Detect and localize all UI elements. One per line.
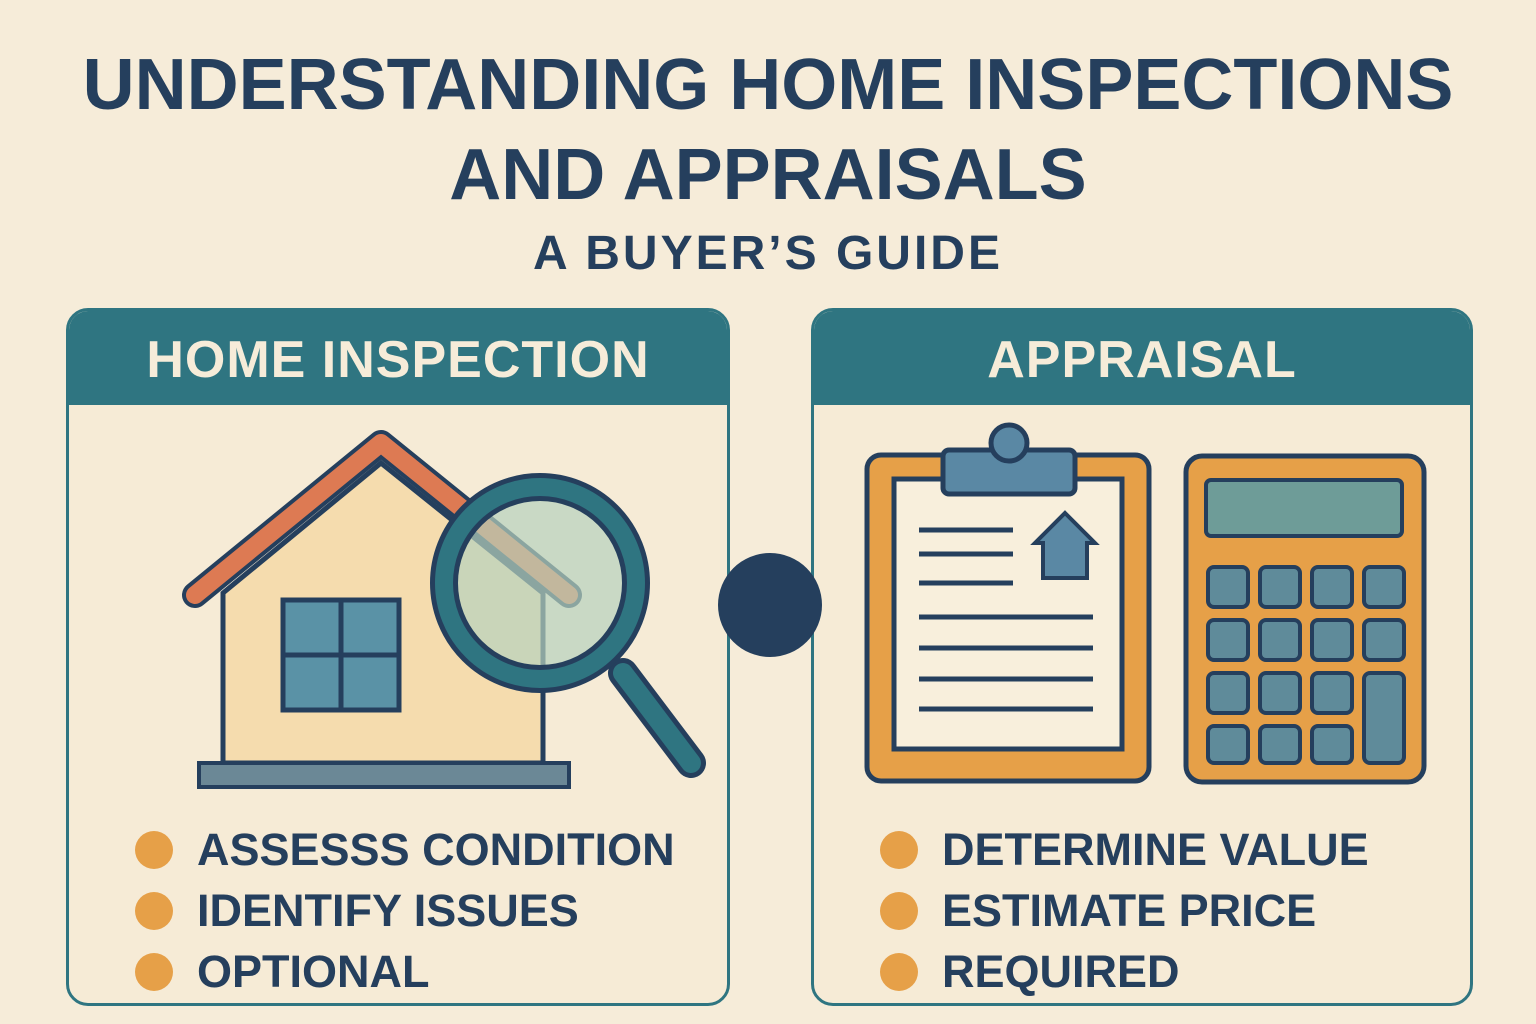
list: inspection points: OPTIONAL [197,946,430,996]
list: appraisal points [880,824,1369,996]
heading: home inspection: HOME INSPECTION [146,331,650,389]
subtitle: A BUYER’S GUIDE [533,227,1003,280]
list: inspection points: ASSESSS CONDITION [197,824,675,874]
list: inspection points: IDENTIFY ISSUES [197,884,579,936]
icon: house with magnifier [182,430,706,789]
heading: appraisal [814,311,1470,405]
list: appraisal points: REQUIRED [942,946,1180,996]
connector circle [718,553,822,657]
icon: clipboard and calculator [864,422,1426,784]
heading: home inspection [69,311,727,405]
list: inspection points [135,824,675,996]
list: appraisal points: ESTIMATE PRICE [942,884,1316,936]
panel: home inspection [66,308,730,1006]
title: AND APPRAISALS [449,135,1087,215]
heading: appraisal: APPRAISAL [987,331,1297,389]
title [83,45,1453,215]
panel: appraisal [811,308,1473,1006]
title: UNDERSTANDING HOME INSPECTIONS [83,45,1453,125]
list: appraisal points: DETERMINE VALUE [942,824,1369,874]
